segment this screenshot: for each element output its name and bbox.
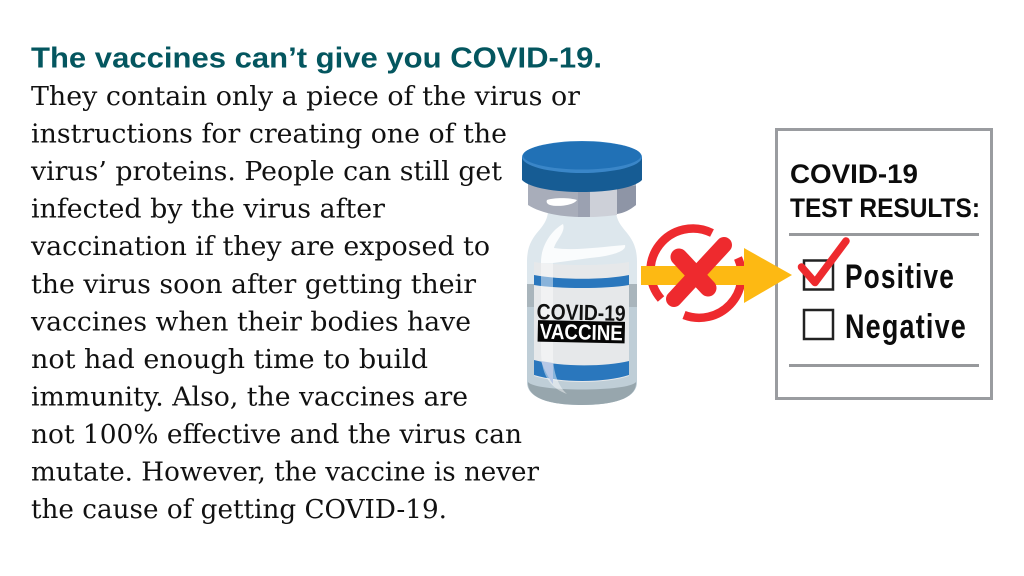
- body text block: [30, 81, 580, 525]
- negative option: [804, 308, 967, 346]
- vial label text: [536, 299, 626, 345]
- panel: test results card: [776, 130, 992, 398]
- icon: vaccine vial: [522, 141, 642, 405]
- vial cap: [522, 157, 642, 192]
- body text block: the virus soon after getting their: [31, 269, 476, 300]
- body text block: They contain only a piece of the virus or: [31, 81, 580, 112]
- icon: prohibited arrow: [641, 229, 792, 318]
- positive option: Positive: [845, 258, 955, 296]
- vial highlight: [541, 224, 625, 263]
- red ring: [650, 229, 742, 318]
- body text block: not 100% effective and the virus can: [31, 419, 522, 450]
- body text block: the cause of getting COVID-19.: [31, 494, 447, 525]
- body text block: mutate. However, the vaccine is never: [31, 456, 539, 488]
- body text block: virus’ proteins. People can still get: [30, 156, 502, 187]
- vial collar: [528, 182, 636, 217]
- positive option: [802, 241, 955, 296]
- body text block: immunity. Also, the vaccines are: [31, 382, 468, 412]
- card heading: [790, 159, 980, 223]
- body text block: vaccines when their bodies have: [30, 306, 471, 337]
- vial label: [534, 262, 629, 382]
- vial glass body: [527, 212, 637, 405]
- yellow arrow: [641, 248, 792, 303]
- body text block: vaccination if they are exposed to: [30, 231, 490, 262]
- body text block: infected by the virus after: [31, 194, 385, 225]
- vial label text: COVID-19: [536, 299, 626, 326]
- vial label text: VACCINE: [540, 320, 623, 345]
- card heading: COVID-19: [790, 159, 918, 189]
- body text block: not had enough time to build: [31, 344, 428, 375]
- red X: [674, 245, 724, 299]
- title: The vaccines can’t give you COVID-19.: [31, 42, 602, 74]
- card heading: TEST RESULTS:: [790, 193, 980, 223]
- negative option: Negative: [845, 308, 967, 346]
- body text block: instructions for creating one of the: [31, 118, 507, 150]
